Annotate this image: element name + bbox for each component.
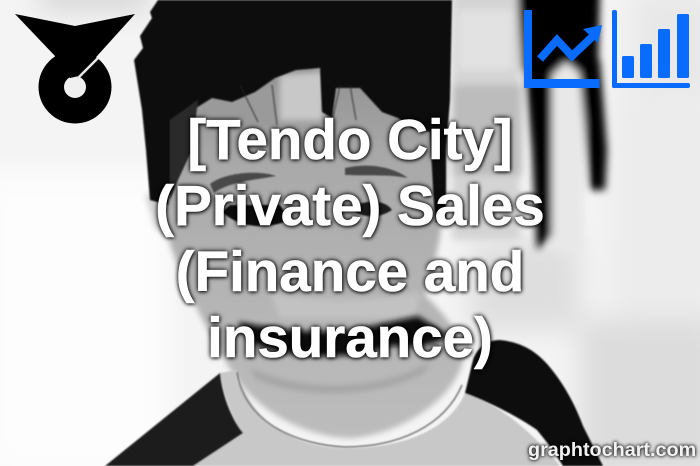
mouth <box>238 316 448 356</box>
face <box>145 60 463 438</box>
icon: bar chart <box>612 10 690 88</box>
title: (Finance and <box>176 240 524 303</box>
title: insurance) <box>207 306 493 369</box>
icon: line chart <box>524 10 602 88</box>
title: (Private) Sales <box>155 174 545 237</box>
title: [Tendo City] <box>187 108 513 171</box>
watermark: graphtochart.com <box>528 439 696 461</box>
logo: Tendo City emblem <box>15 14 135 124</box>
shirt collar and chest <box>193 370 560 466</box>
eyes and brows <box>210 166 408 226</box>
title <box>154 108 546 370</box>
background: figures behind <box>452 0 607 250</box>
hair <box>134 0 452 222</box>
shirt: dark sleeves <box>105 340 603 466</box>
